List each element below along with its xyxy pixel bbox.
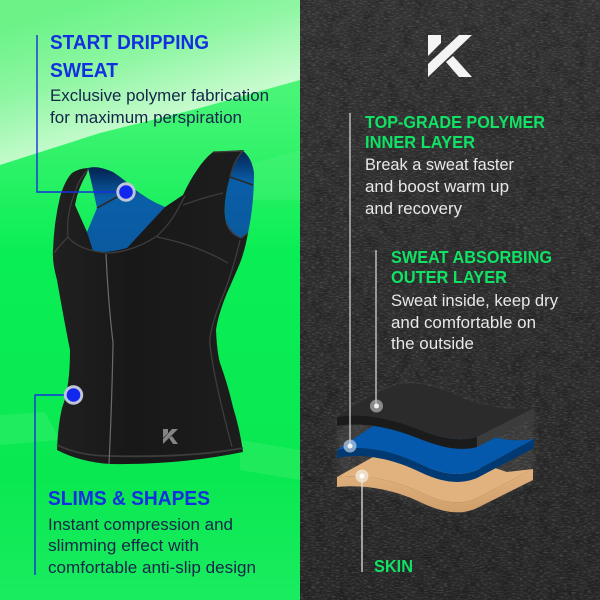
heading: top-grade polymer inner layer: TOP-GRADE POLYMER: [365, 112, 545, 132]
text: start dripping sweat description: for maximum perspiration: [50, 109, 242, 127]
callout line: start dripping sweat: [37, 35, 126, 192]
vest body: [53, 150, 248, 464]
black layer: [337, 383, 534, 449]
text: start dripping sweat description: Exclusive polymer fabrication: [50, 87, 269, 105]
heading: skin: SKIN: [374, 556, 413, 576]
text: slims and shapes description: comfortable anti-slip design: [48, 559, 256, 577]
marker: blue layer: [344, 440, 356, 452]
callout line: skin: [361, 476, 363, 572]
text: slims and shapes description: Instant compression and: [48, 516, 233, 534]
callout line: slims and shapes: [35, 395, 64, 575]
panel: dark textured background: [300, 0, 600, 600]
text: polymer layer description: Break a sweat faster: [365, 156, 514, 174]
text: polymer layer description: and boost warm up: [365, 178, 509, 196]
marker: waist: [64, 385, 83, 405]
heading: start dripping sweat: SWEAT: [50, 60, 118, 82]
callout line: sweat absorbing layer: [375, 250, 377, 406]
text: slims and shapes description: slimming effect with: [48, 537, 199, 555]
heading: sweat absorbing outer layer: OUTER LAYER: [391, 267, 507, 287]
icon: K brand logo: [428, 35, 472, 77]
text: absorbing layer description: the outside: [391, 335, 474, 353]
heading: top-grade polymer inner layer: [365, 112, 545, 152]
heading: sweat absorbing outer layer: [391, 247, 552, 287]
text: absorbing layer description: Sweat inside, keep dry: [391, 292, 559, 310]
vest zipper: [106, 254, 113, 464]
text: start dripping sweat description: [50, 87, 269, 127]
vest illustration: [53, 150, 254, 464]
layer diagram: [337, 383, 534, 512]
heading: top-grade polymer inner layer: INNER LAYER: [365, 132, 475, 152]
text: slims and shapes description: [48, 516, 256, 577]
blue layer: [337, 425, 534, 482]
marker: black layer: [370, 400, 383, 412]
text: polymer layer description: [365, 156, 514, 218]
text: absorbing layer description: and comfortable on: [391, 314, 536, 332]
marker: upper vest: [116, 182, 136, 202]
marker: skin layer: [356, 470, 368, 482]
heading: sweat absorbing outer layer: SWEAT ABSORBING: [391, 247, 552, 267]
heading: start dripping sweat: [50, 32, 209, 82]
callout line: polymer inner layer: [349, 113, 351, 446]
heading: start dripping sweat: START DRIPPING: [50, 32, 209, 54]
icon: K logo on vest: [163, 429, 178, 444]
text: absorbing layer description: [391, 292, 559, 353]
vest inner back, blue: [87, 167, 172, 256]
heading: slims and shapes: SLIMS & SHAPES: [48, 488, 210, 510]
layer glow: [337, 383, 534, 510]
text: polymer layer description: and recovery: [365, 200, 463, 218]
panel: green background: [0, 0, 300, 600]
vest inner right armhole, blue: [225, 151, 254, 238]
vest seams: [54, 151, 253, 456]
skin layer: [337, 457, 533, 512]
